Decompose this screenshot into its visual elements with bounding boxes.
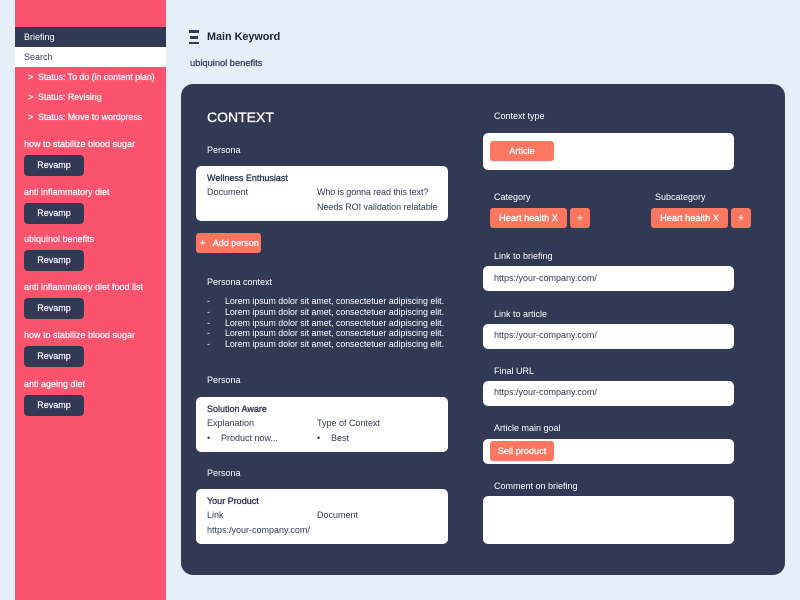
revamp button 5 [24, 346, 84, 367]
button: add subcategory [731, 208, 751, 228]
tag: heart health subcategory [651, 208, 728, 228]
card: your product: Document [317, 510, 358, 520]
tag: heart health category [490, 208, 567, 228]
field: link to briefing: https:/your-company.com/ [494, 273, 597, 283]
field: final url: https:/your-company.com/ [494, 387, 597, 397]
card: wellness enthusiast: Who is gonna read this text? [317, 187, 428, 197]
list: persona context lorem ipsum: - [207, 307, 210, 317]
card: solution aware: Best [331, 433, 349, 443]
list: persona context lorem ipsum: - [207, 296, 210, 306]
list: persona context lorem ipsum: Lorem ipsum dolor sit amet, consectetuer adipiscing elit. [225, 296, 444, 306]
field: link to article: https:/your-company.com/ [494, 330, 597, 340]
status item: move to wordpress: > Status: Move to wordpress [28, 112, 142, 122]
keyword: how to stabilize blood sugar: how to stabilize blood sugar [24, 330, 135, 340]
button: add subcategory: + [738, 213, 744, 223]
card: solution aware: Product now... [221, 433, 278, 443]
button: add person: + Add person [200, 238, 259, 248]
label: subcategory: Subcategory [655, 192, 706, 202]
status item: revising: > Status: Revising [28, 92, 102, 102]
tag: article [490, 141, 554, 161]
panel: context [181, 84, 785, 575]
button: add category: + [577, 213, 583, 223]
keyword value: ubiquinol benefits [190, 58, 262, 68]
list: persona context lorem ipsum: Lorem ipsum dolor sit amet, consectetuer adipiscing elit. [225, 328, 444, 338]
tag: sell product [490, 441, 554, 461]
revamp button 1 [24, 155, 84, 176]
label: comment on briefing: Comment on briefing [494, 481, 578, 491]
label: link to article: Link to article [494, 309, 547, 319]
label: persona 3: Persona [207, 468, 241, 478]
card: your product: Link [207, 510, 224, 520]
tag: heart health subcategory: Heart health X [660, 213, 719, 223]
button: add person [196, 233, 261, 253]
label: final url: Final URL [494, 366, 534, 376]
label: article main goal: Article main goal [494, 423, 561, 433]
card: wellness enthusiast: Wellness Enthusiast [207, 173, 288, 183]
card: wellness enthusiast: Document [207, 187, 248, 197]
sidebar [15, 0, 166, 600]
list: persona context lorem ipsum: Lorem ipsum dolor sit amet, consectetuer adipiscing elit. [225, 339, 444, 349]
label: persona context: Persona context [207, 277, 272, 287]
label: persona 1: Persona [207, 145, 241, 155]
list: persona context lorem ipsum: Lorem ipsum dolor sit amet, consectetuer adipiscing elit. [225, 307, 444, 317]
field: final url [483, 381, 734, 406]
card: solution aware: • [317, 433, 320, 443]
field: link to briefing [483, 266, 734, 291]
card: solution aware: Solution Aware [207, 404, 267, 414]
tag: sell product: Sell product [498, 446, 546, 456]
card: your product [196, 489, 448, 544]
revamp button 6: Revamp [37, 400, 71, 410]
heading: context: CONTEXT [207, 109, 274, 125]
card: solution aware: • [207, 433, 210, 443]
keyword: anti ageing diet: anti ageing diet [24, 379, 85, 389]
search row [15, 47, 166, 67]
tag: heart health category: Heart health X [499, 213, 558, 223]
label: link to briefing: Link to briefing [494, 251, 553, 261]
keyword: anti inflammatory diet: anti inflammatory diet [24, 187, 110, 197]
revamp button 4: Revamp [37, 303, 71, 313]
list: persona context lorem ipsum: Lorem ipsum dolor sit amet, consectetuer adipiscing elit. [225, 318, 444, 328]
revamp button 5: Revamp [37, 351, 71, 361]
revamp button 3: Revamp [37, 255, 71, 265]
card: solution aware: Type of Context [317, 418, 380, 428]
field: article main goal [483, 439, 734, 464]
field: context type [483, 133, 734, 170]
tag: article: Article [509, 146, 535, 156]
label: context type: Context type [494, 111, 545, 121]
revamp button 3 [24, 250, 84, 271]
label: persona 2: Persona [207, 375, 241, 385]
card: wellness enthusiast [196, 166, 448, 221]
list: persona context lorem ipsum: - [207, 339, 210, 349]
button: add category [570, 208, 590, 228]
revamp button 1: Revamp [37, 160, 71, 170]
revamp button 2: Revamp [37, 208, 71, 218]
field: comment on briefing [483, 496, 734, 544]
list: persona context lorem ipsum [207, 296, 444, 349]
keyword: anti inflammatory diet food list: anti inflammatory diet food list [24, 282, 143, 292]
field: link to article [483, 324, 734, 349]
list: persona context lorem ipsum: - [207, 328, 210, 338]
keyword: how to stabilize blood sugar: how to stabilize blood sugar [24, 139, 135, 149]
icon: menu [189, 30, 199, 44]
card: your product: https:/your-company.com/ [207, 525, 310, 535]
revamp button 4 [24, 298, 84, 319]
heading: main keyword: Main Keyword [207, 31, 280, 43]
label: category: Category [494, 192, 531, 202]
search row: Search [24, 52, 53, 62]
revamp button 2 [24, 203, 84, 224]
card: wellness enthusiast: Needs ROI validation relatable [317, 202, 438, 212]
revamp button 6 [24, 395, 84, 416]
card: your product: Your Product [207, 496, 259, 506]
sidebar header: Briefing: Briefing [24, 32, 55, 42]
list: persona context lorem ipsum: - [207, 318, 210, 328]
card: solution aware: Explanation [207, 418, 254, 428]
sidebar header: Briefing [15, 27, 166, 47]
keyword: ubiquinol benefits: ubiquinol benefits [24, 234, 94, 244]
card: solution aware [196, 397, 448, 452]
status item: to do: > Status: To do (in content plan) [28, 72, 155, 82]
